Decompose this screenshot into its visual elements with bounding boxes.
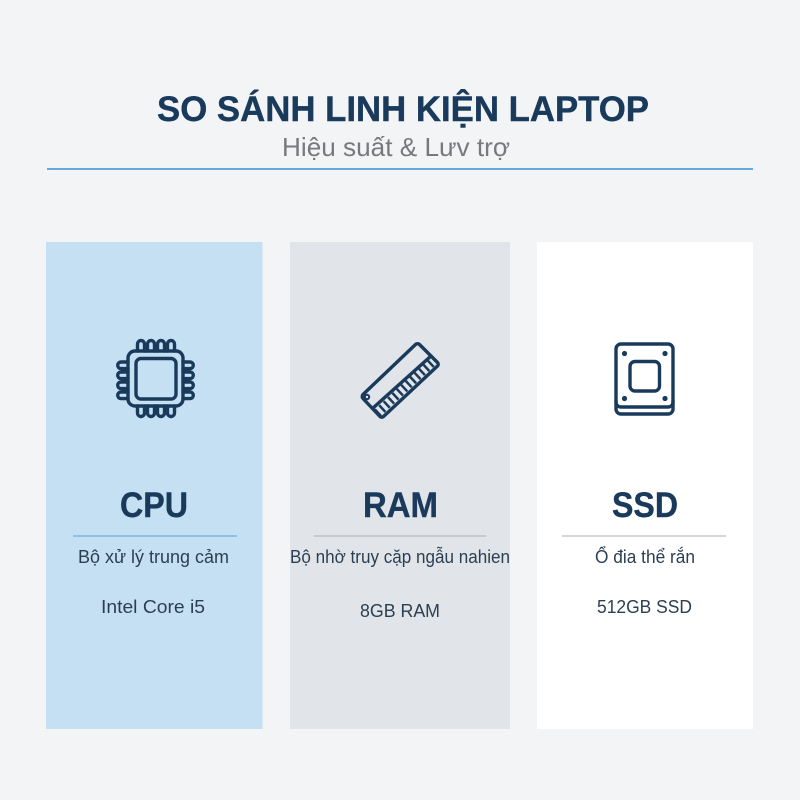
CPU spec: Intel Core i5 [101,597,205,617]
icon: CPU chip [118,341,193,417]
title: SO SÁNH LINH KIỆN LAPTOP [157,89,649,129]
RAM spec: 8GB RAM [360,601,440,621]
panel: CPU [46,242,262,729]
CPU panel background [46,242,262,729]
RAM panel background [290,242,510,729]
SSD heading: SSD [612,486,678,525]
icon: RAM module [362,344,438,417]
RAM heading: RAM [363,486,438,525]
panel: RAM [290,242,510,729]
header rule [47,168,753,170]
CPU description: Bộ xử lý trung cảm [78,547,229,567]
RAM description: Bộ nhờ truy cặp ngẫu nahien [290,546,510,567]
panel: SSD [537,242,753,729]
icon: SSD drive [616,344,673,414]
SSD spec: 512GB SSD [597,597,692,617]
CPU heading: CPU [120,486,188,525]
subtitle: Hiệu suất & Lưv trợ [282,132,510,162]
SSD panel background [537,242,753,729]
SSD description: Ổ đia thể rắn [595,546,695,567]
